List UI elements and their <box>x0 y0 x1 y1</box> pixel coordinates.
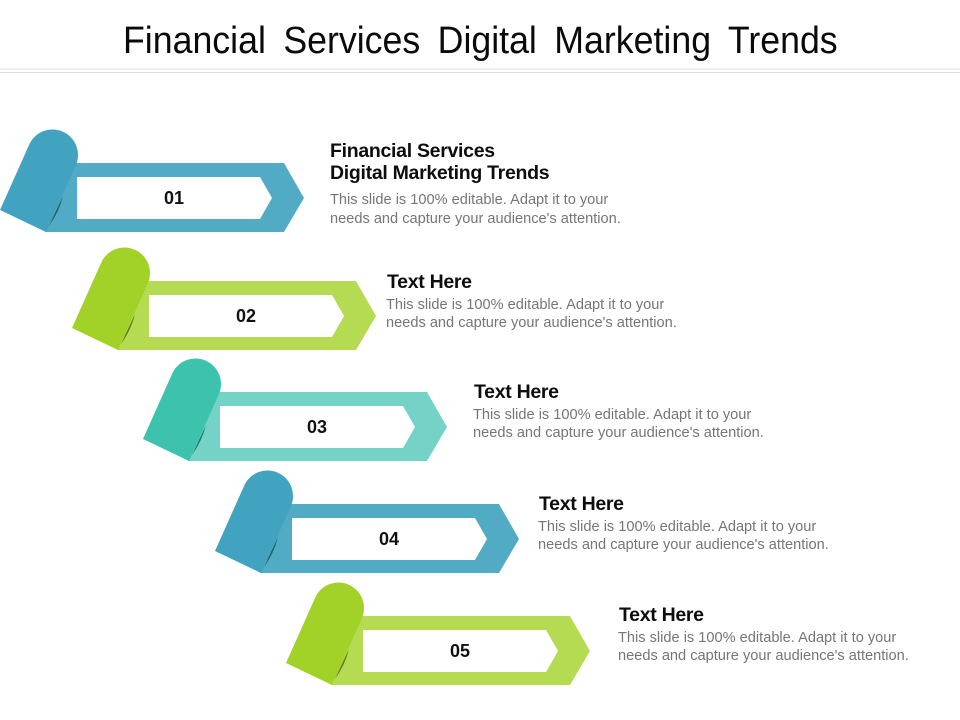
step 05 text: Text Here <box>619 604 704 626</box>
step 01 text: Digital Marketing Trends <box>330 162 550 184</box>
step 04 text: needs and capture your audience's attention. <box>538 537 829 553</box>
step 02 text: needs and capture your audience's attention. <box>386 315 677 331</box>
step 01 text <box>330 140 621 227</box>
step 05 text: This slide is 100% editable. Adapt it to your <box>618 630 896 646</box>
step 04 text: Text Here <box>539 493 624 515</box>
number 05: 05 <box>450 641 470 661</box>
step 04 text: This slide is 100% editable. Adapt it to your <box>538 519 816 535</box>
step 04 text <box>538 493 829 553</box>
step 02 text <box>386 271 677 331</box>
number 02: 02 <box>236 306 256 326</box>
step 03 text: This slide is 100% editable. Adapt it to your <box>473 407 751 423</box>
number 04: 04 <box>379 529 399 549</box>
step 05 text <box>618 604 909 664</box>
step 03 text: needs and capture your audience's attention. <box>473 425 764 441</box>
step 02 text: This slide is 100% editable. Adapt it to your <box>386 297 664 313</box>
number 01: 01 <box>164 188 184 208</box>
step 03 text <box>473 381 764 441</box>
step 05 text: needs and capture your audience's attention. <box>618 648 909 664</box>
step 01 text: needs and capture your audience's attention. <box>330 211 621 227</box>
number 03: 03 <box>307 417 327 437</box>
step 05 arrow <box>286 582 590 685</box>
step 01 text: Financial Services <box>330 140 495 162</box>
step 02 arrow <box>72 247 376 350</box>
step 01 text: This slide is 100% editable. Adapt it to your <box>330 192 608 208</box>
step 03 text: Text Here <box>474 381 559 403</box>
step 02 text: Text Here <box>387 271 472 293</box>
step 04 arrow <box>215 470 519 573</box>
step 01 arrow <box>0 129 304 232</box>
title: Financial Services Digital Marketing Trends <box>123 19 838 61</box>
step 03 arrow <box>143 358 447 461</box>
